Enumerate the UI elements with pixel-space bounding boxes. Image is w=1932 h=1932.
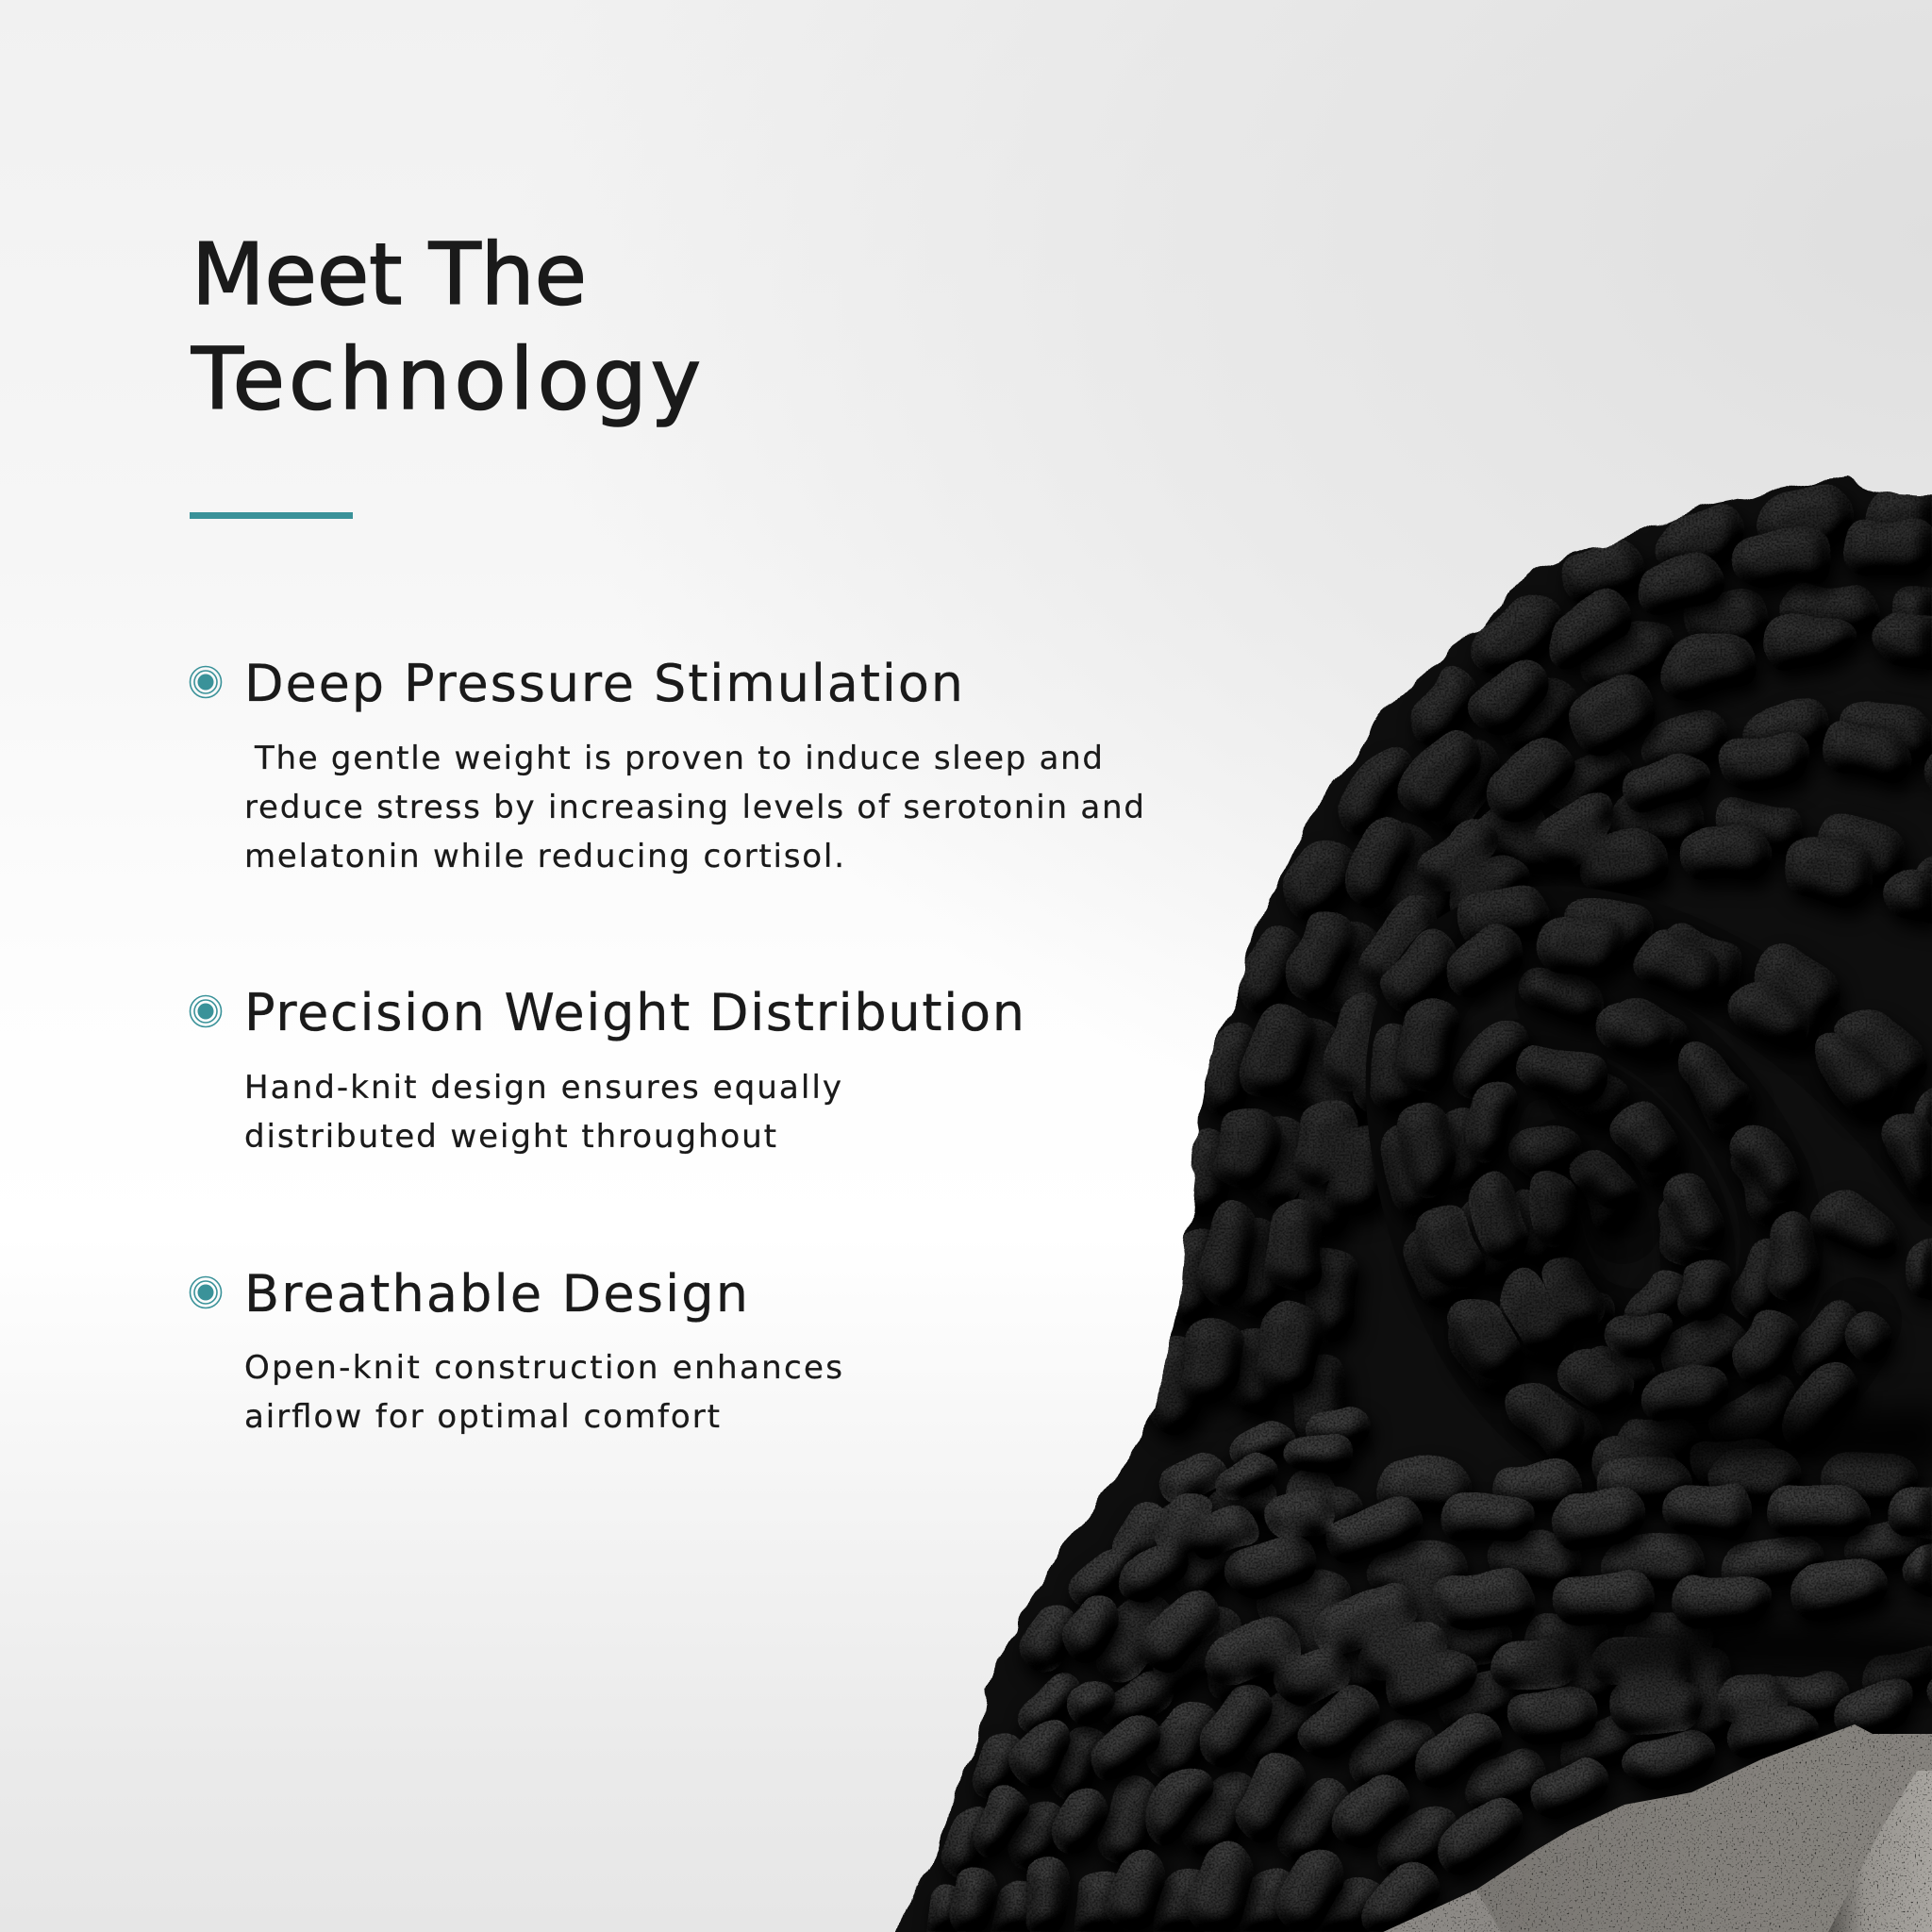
feature: breathable design [191,1264,842,1436]
icon: teal target bullet [191,666,221,698]
description [244,740,1144,875]
description [244,1349,842,1436]
title accent divider [190,512,353,519]
title: Meet The [192,225,587,325]
description [244,1069,841,1156]
photo: knitted black weighted blanket [849,453,1932,1932]
description: Hand-knit design ensures equally [244,1069,841,1107]
concrete base under blanket [1379,1724,1932,1932]
lower braided folds [943,1424,1932,1932]
description: distributed weight throughout [244,1118,776,1156]
upper braided bands [1175,518,1932,1430]
icon: teal target bullet [191,1277,221,1307]
description: reduce stress by increasing levels of serotonin and [244,789,1144,826]
heading: Precision Weight Distribution [244,983,1024,1042]
title [191,225,701,429]
icon: teal target bullet [191,996,221,1026]
rolled spiral of blanket [1396,916,1932,1473]
title: Technology [191,330,701,429]
heading: Deep Pressure Stimulation [244,654,963,713]
description: melatonin while reducing cortisol. [244,838,844,875]
description: Open-knit construction enhances [244,1349,842,1387]
heading: Breathable Design [244,1264,748,1324]
shadows between folds [1528,1113,1932,1674]
description: The gentle weight is proven to induce sleep and [254,740,1103,777]
description: airflow for optimal comfort [244,1398,720,1436]
feature: deep pressure stimulation [191,654,1144,875]
feature: precision weight distribution [191,983,1024,1156]
